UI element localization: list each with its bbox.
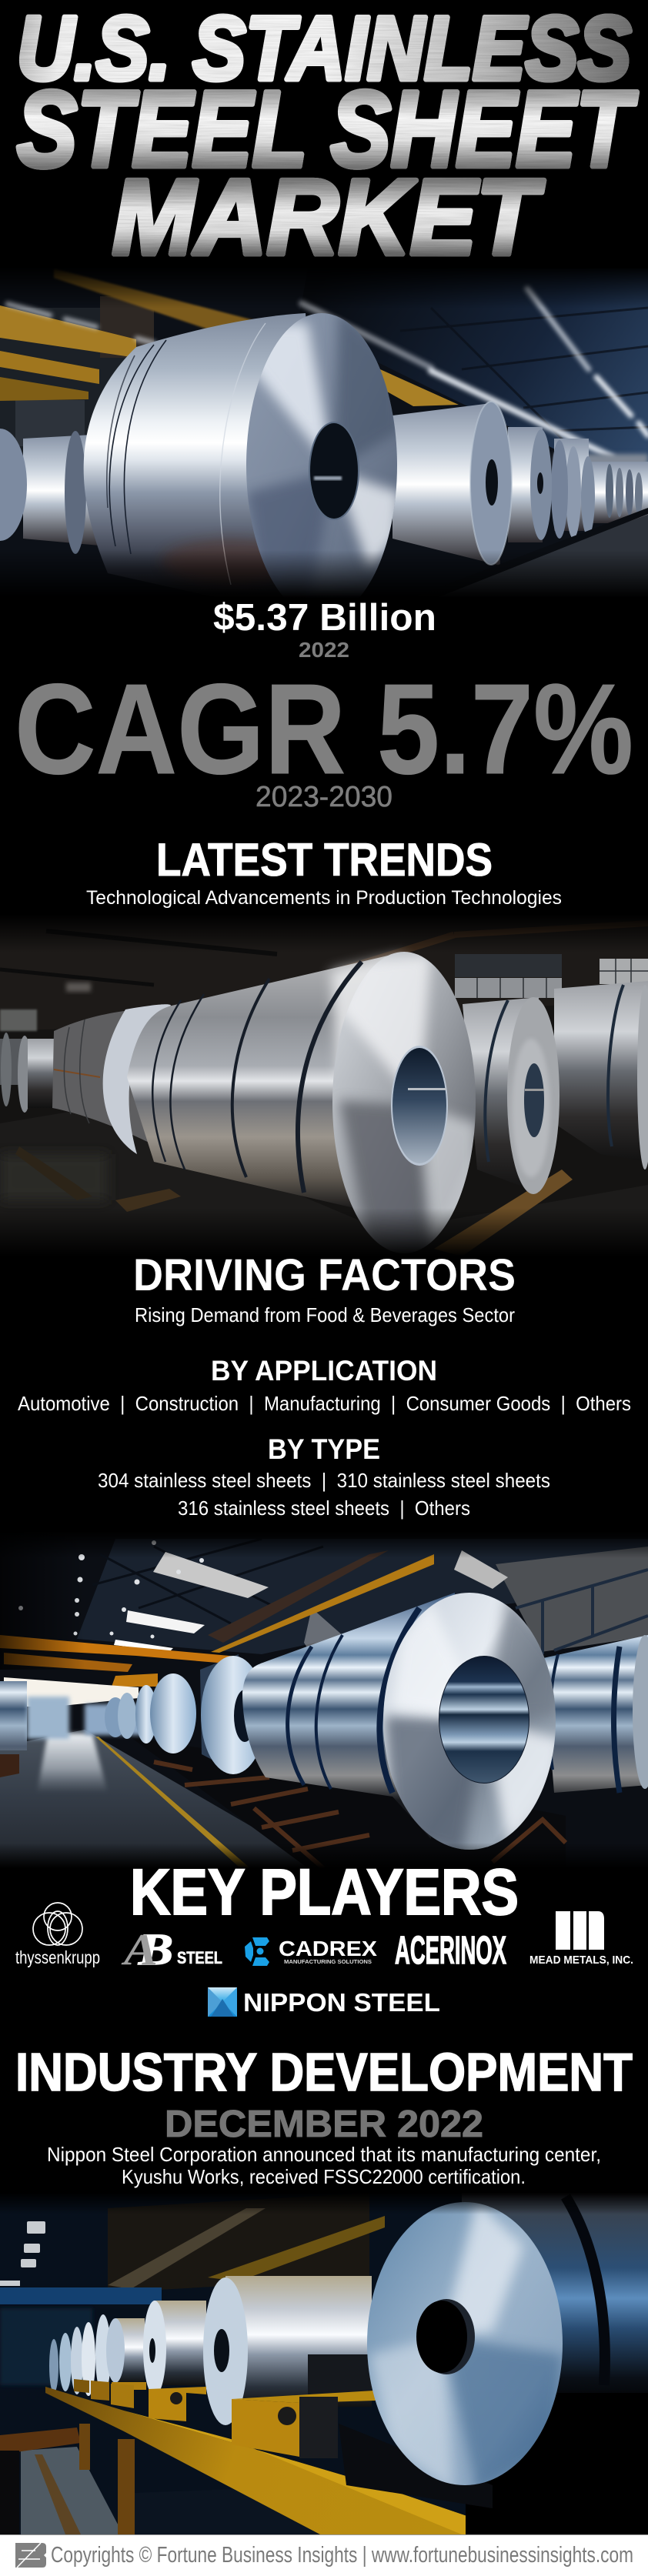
by type: BY TYPE [268,1433,380,1465]
driving factors: DRIVING FACTORS [133,1250,516,1300]
driving factors [133,1250,516,1326]
development text [47,2143,601,2188]
image: coils in factory aisle [0,1531,648,1868]
big coil [339,2193,648,2539]
image: long coil in warehouse [0,914,648,1262]
small coils [49,2301,206,2396]
development text: Kyushu Works, received FSSC22000 certification. [122,2165,526,2188]
market value: $5.37 Billion [213,597,436,639]
orange beams [208,1550,389,1643]
logo: Acerinox: ACERINOX [395,1928,506,1972]
by type [98,1433,550,1520]
yellow rail and blocks [45,2379,466,2534]
left small coils [0,1033,54,1113]
footer bar [0,2534,648,2576]
by application [18,1355,631,1415]
market value: 2022 [299,638,349,662]
logo: Mead Metals: MEAD METALS, INC. [529,1954,633,1967]
logo: Mead Metals [529,1911,633,1967]
right coil [463,997,559,1194]
logo: Cadrex [245,1937,377,1966]
main coil [83,313,397,595]
title [17,0,638,277]
skylights [153,1552,269,1598]
hero image: steel coils in warehouse [0,265,648,623]
wall panels [496,1547,648,1652]
far right coil [554,981,648,1170]
by application: BY APPLICATION [211,1355,437,1386]
logo: Nippon Steel: NIPPON STEEL [243,1988,440,2017]
pallets [0,1754,567,1865]
left coil section [52,1004,171,1154]
bright window [4,1677,139,1707]
logo: Cadrex: MANUFACTURING SOLUTIONS [284,1958,372,1965]
floor [463,515,648,588]
image: coils on yellow rail [0,2193,648,2539]
by type: 316 stainless steel sheets | Others [178,1497,470,1520]
logo: thyssenkrupp [15,1903,100,1967]
latest trends: Technological Advancements in Production Technologies [86,887,562,909]
right coil [543,1635,648,1793]
by type: 304 stainless steel sheets | 310 stainless steel sheets [98,1469,550,1492]
row of discs [85,1654,266,1774]
development date: DECEMBER 2022 [165,2104,483,2145]
logo: thyssenkrupp: thyssenkrupp [15,1947,100,1967]
floor [21,2447,123,2534]
logo: AB Steel: B [138,1924,173,1974]
main coil [242,1593,562,1854]
CAGR figure: 2023-2030 [256,781,392,813]
long main coil [127,952,477,1262]
left coil [0,429,108,554]
coil 2 [203,2276,373,2425]
logo: AB Steel: STEEL [177,1948,222,1967]
development text: Nippon Steel Corporation announced that its manufacturing center, [47,2143,601,2166]
driving factors: Rising Demand from Food & Beverages Sector [135,1303,515,1326]
logo: AB Steel: A [122,1924,158,1974]
key players heading: KEY PLAYERS [130,1856,519,1928]
title: MARKET [112,158,544,277]
right coils row [392,402,648,566]
latest trends [86,834,562,909]
logo: AB Steel [122,1924,222,1974]
market value [213,597,436,662]
logo: Cadrex: CADREX [279,1937,377,1960]
latest trends: LATEST TRENDS [156,834,493,886]
far-left coils [0,1681,69,1750]
footer logo [15,2543,46,2568]
lights [18,1540,204,1639]
floor [0,1730,297,1860]
